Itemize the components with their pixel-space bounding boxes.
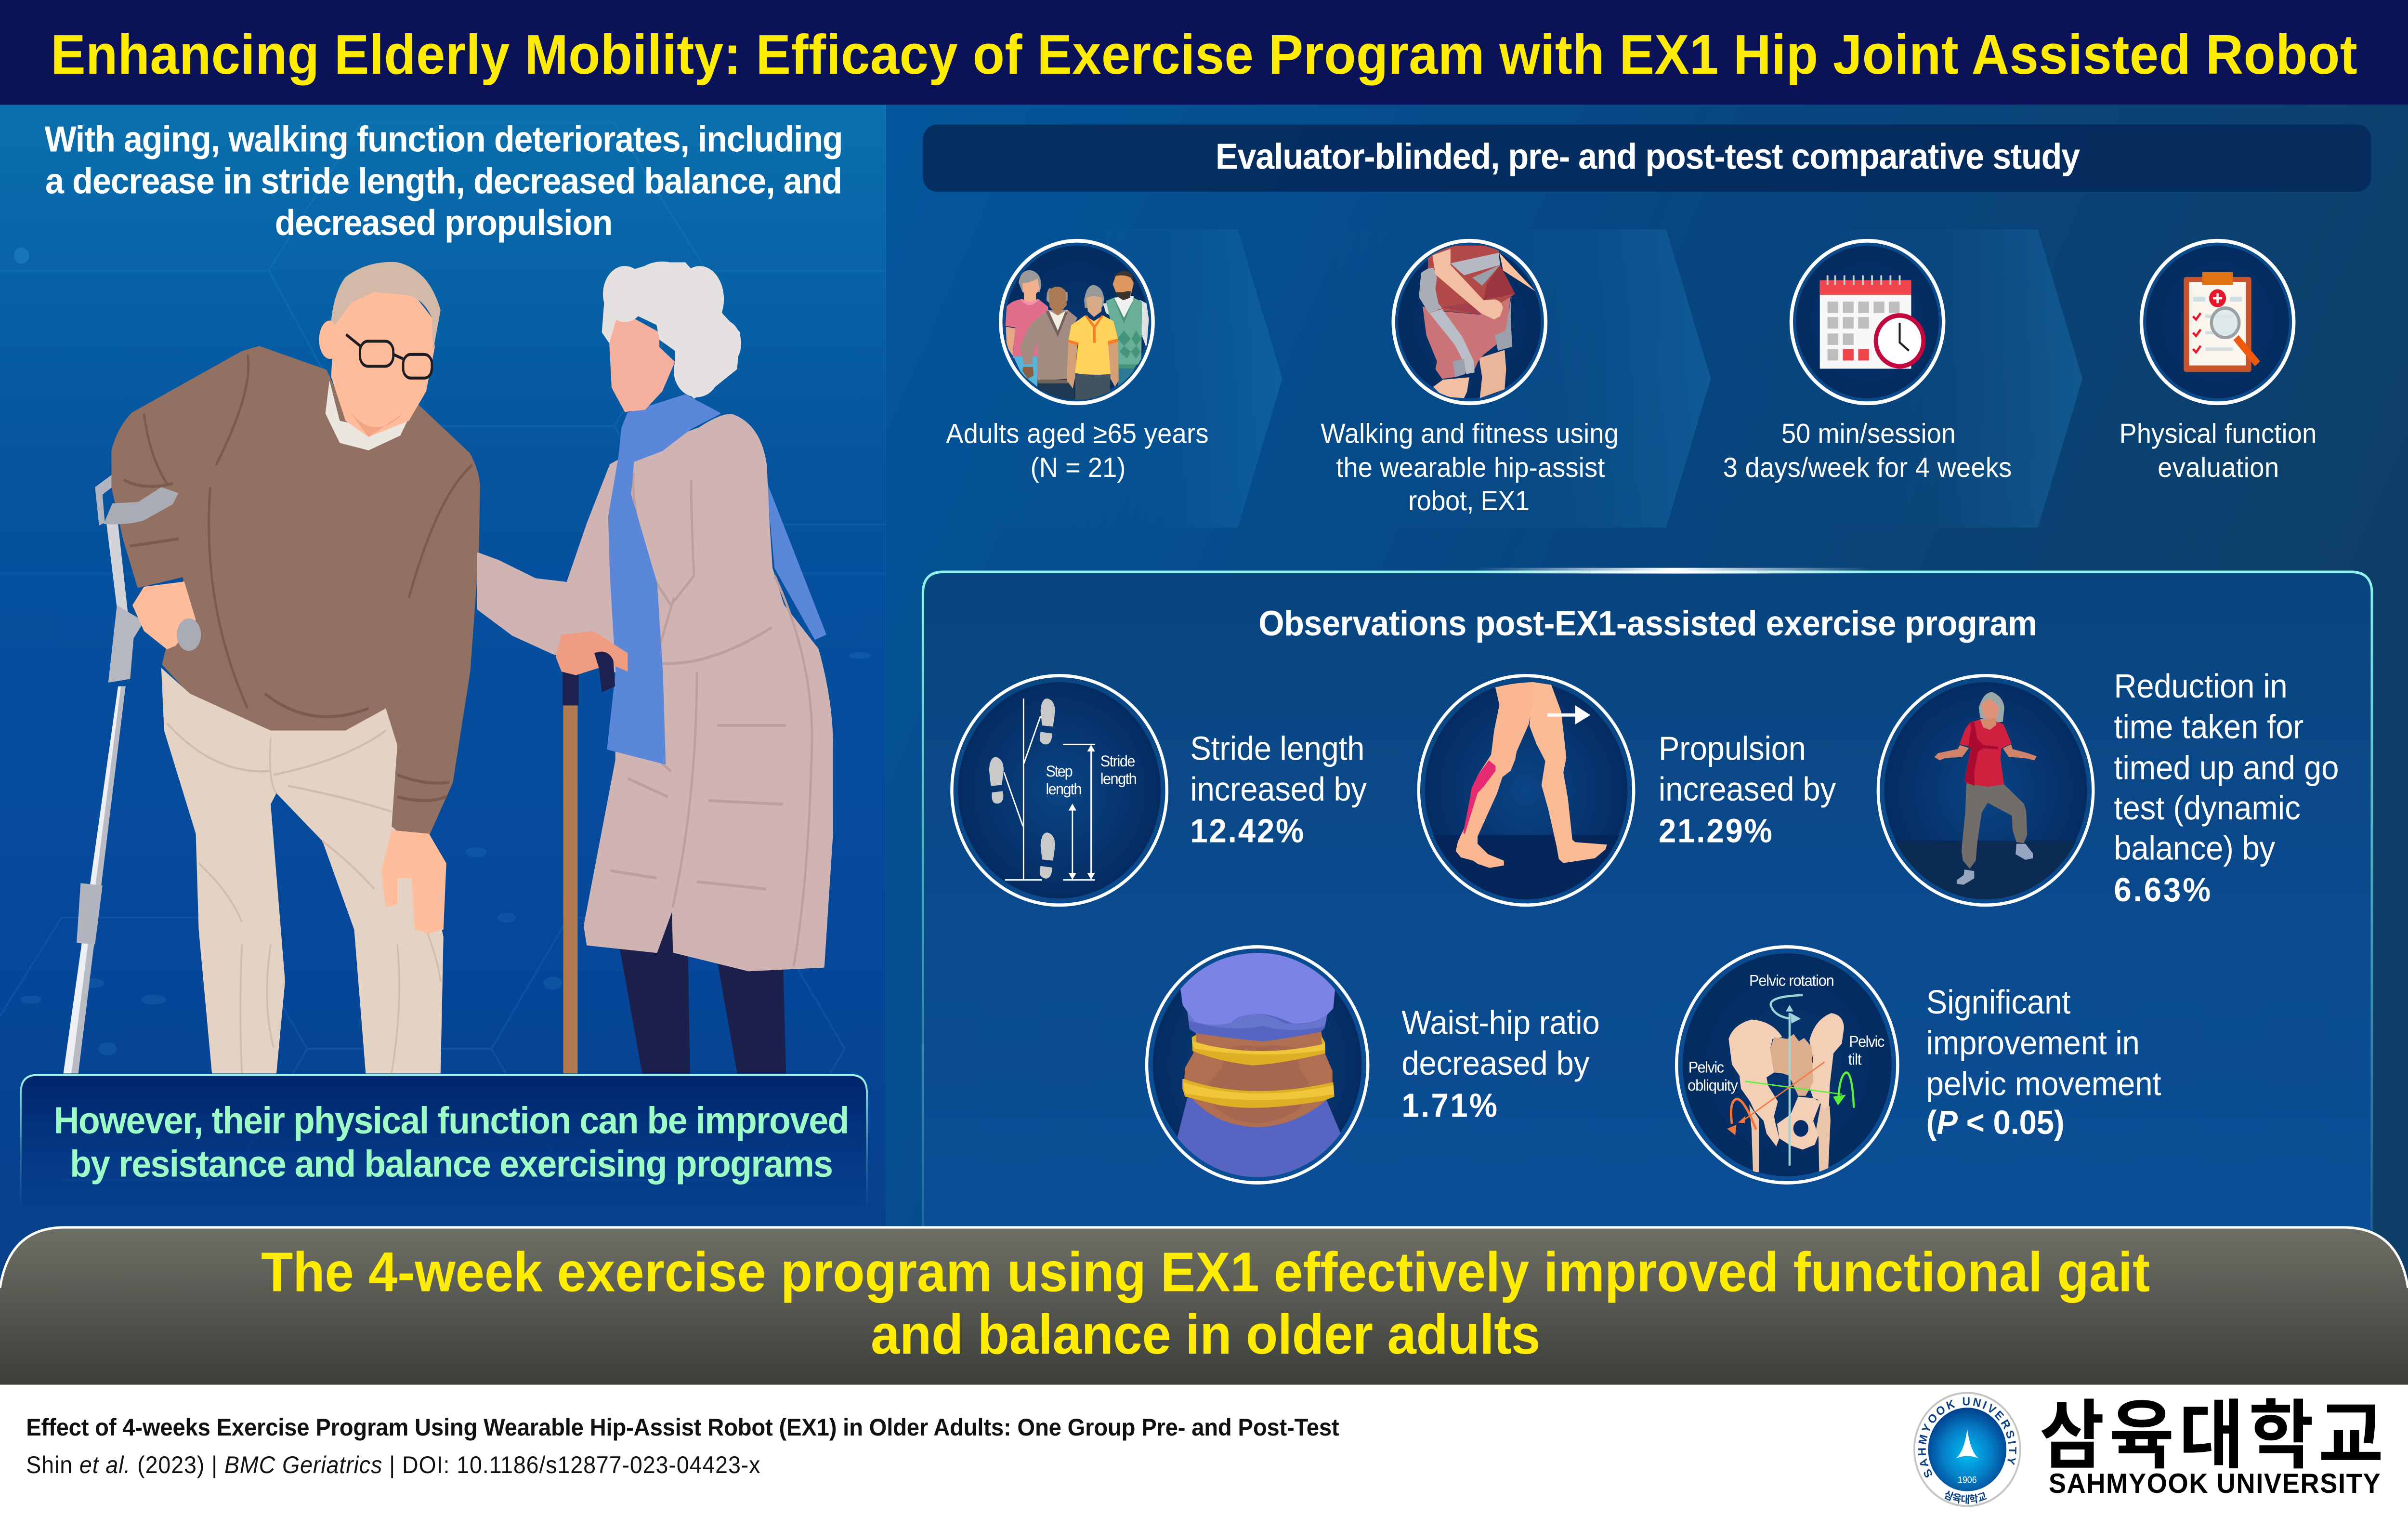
logo: university seal: 삼육대학교	[1945, 1490, 1987, 1504]
step 4: evaluation	[2120, 241, 2316, 483]
step 1 label: (N = 21)	[1031, 451, 1125, 483]
hand on crutch	[132, 581, 196, 649]
intro text block: a decrease in stride length, decreased balance, and	[45, 161, 842, 201]
observation: timed up and go	[1873, 668, 2339, 909]
step 1: participants	[946, 241, 1209, 483]
step 1 label: Adults aged ≥65 years	[946, 418, 1209, 449]
icon: walking legs	[1413, 676, 1638, 907]
hand on knee	[381, 830, 446, 934]
panel: study heading	[923, 125, 2371, 192]
glasses	[346, 334, 432, 378]
observation: propulsion	[1413, 676, 1836, 907]
icon: calendar and clock	[1791, 241, 1944, 403]
intro text block: decreased propulsion	[275, 203, 613, 243]
coat	[478, 415, 832, 970]
chevron arrow 1	[983, 229, 1283, 527]
step 3: schedule	[1723, 241, 2012, 483]
timed up and go text: balance) by	[2114, 830, 2275, 867]
icon: footsteps diagram: length	[1100, 770, 1137, 788]
intro text block	[44, 119, 843, 243]
stride length text: 12.42%	[1190, 813, 1304, 850]
stride length text: Stride length	[1190, 730, 1365, 767]
logo: university wordmark: SAHMYOOK UNIVERSITY	[2049, 1467, 2381, 1499]
background: right panel	[886, 105, 2408, 1317]
waist-hip text	[1401, 1004, 1600, 1124]
panel: observations	[923, 568, 2372, 1278]
icon: footsteps diagram: length	[1046, 780, 1082, 798]
hair	[602, 262, 741, 399]
conclusion text	[261, 1241, 2150, 1366]
chevron arrow 2	[1321, 229, 1711, 527]
step 4 label: evaluation	[2158, 451, 2279, 483]
propulsion text: increased by	[1659, 771, 1836, 808]
head	[319, 262, 441, 437]
head	[609, 310, 675, 412]
pelvic movement text	[1926, 984, 2161, 1142]
step 2 label: Walking and fitness using	[1321, 418, 1619, 449]
timed up and go text	[2114, 668, 2339, 909]
citation title: Effect of 4-weeks Exercise Program Using Wearable Hip-Assist Robot (EX1) in Older Adults: One Group Pre- and Post-Test	[26, 1414, 1339, 1441]
trousers	[161, 668, 444, 1073]
conclusion text: The 4-week exercise program using EX1 effectively improved functional gait	[261, 1241, 2150, 1303]
waist-hip text: decreased by	[1401, 1045, 1590, 1082]
step 4 label	[2120, 418, 2316, 483]
icon: pelvis with motion axes	[1676, 947, 1898, 1183]
observations heading: Observations post-EX1-assisted exercise program	[1258, 604, 2037, 643]
waist-hip text: 1.71%	[1401, 1087, 1497, 1124]
timed up and go text: Reduction in	[2114, 668, 2288, 705]
conclusion text: and balance in older adults	[871, 1304, 1540, 1366]
timed up and go text: timed up and go	[2114, 750, 2339, 787]
propulsion text: 21.29%	[1659, 813, 1772, 850]
icon: pelvis with motion axes: Pelvic rotation	[1749, 972, 1834, 989]
observation: pelvic movement	[1676, 947, 2161, 1183]
step 4 label: Physical function	[2120, 418, 2316, 449]
step 1 label	[946, 418, 1209, 483]
icon: hip-assist robot	[1393, 241, 1546, 403]
step 2 label: robot, EX1	[1408, 485, 1530, 516]
logo: university wordmark: 삼육대학교	[2040, 1374, 2383, 1484]
propulsion text	[1659, 730, 1836, 850]
icon: standing older adult	[1873, 676, 2099, 908]
observation: waist-hip ratio	[1147, 947, 1600, 1183]
icon: footsteps diagram: Step	[1046, 762, 1073, 780]
waist-hip text: Waist-hip ratio	[1401, 1004, 1600, 1041]
intro text block: With aging, walking function deteriorates, including	[44, 119, 843, 159]
citation details: Shin et al. (2023) | BMC Geriatrics | DOI: 10.1186/s12877-023-04423-x	[26, 1452, 760, 1479]
back scarf	[766, 480, 826, 640]
timed up and go text: 6.63%	[2114, 871, 2211, 909]
step 2 label: the wearable hip-assist	[1336, 451, 1605, 483]
propulsion text: Propulsion	[1659, 730, 1806, 767]
cane	[563, 672, 579, 1073]
icon: clipboard and magnifier	[2141, 241, 2294, 403]
callout: physical function can be improved	[21, 1075, 867, 1210]
timed up and go text: test (dynamic	[2114, 790, 2301, 827]
logo: university seal: 1906	[1958, 1475, 1977, 1485]
stride length text: increased by	[1190, 771, 1367, 808]
logo: university seal: SAHMYOOK UNIVERSITY	[1918, 1397, 2016, 1478]
pelvic movement text: improvement in	[1926, 1025, 2140, 1062]
pelvic movement text: Significant	[1926, 984, 2071, 1021]
icon: older adults group	[1001, 241, 1153, 403]
hand on cane	[556, 631, 628, 675]
illustration: elderly man with crutch	[64, 262, 479, 1073]
scarf	[608, 395, 720, 764]
chevron arrow 3	[1720, 229, 2082, 527]
icon: pelvis with motion axes: obliquity	[1688, 1076, 1738, 1094]
title text: Enhancing Elderly Mobility: Efficacy of Exercise Program with EX1 Hip Joint Assisted Robot	[51, 24, 2357, 86]
callout: physical function can be improved: However, their physical function can be improved	[54, 1099, 849, 1142]
step 2 label	[1321, 418, 1619, 516]
arm rest of crutch	[104, 487, 179, 525]
stride length text	[1190, 730, 1367, 850]
icon: pelvis with motion axes: Pelvic	[1688, 1058, 1724, 1076]
sweater	[112, 347, 479, 834]
pelvic movement text: pelvic movement	[1926, 1066, 2161, 1103]
pelvic movement text: (P < 0.05)	[1926, 1104, 2065, 1142]
step 3 label: 3 days/week for 4 weeks	[1723, 451, 2012, 483]
conclusion banner	[0, 1227, 2408, 1385]
legs	[619, 908, 786, 1073]
step 3 label: 50 min/session	[1781, 418, 1956, 449]
icon: waist with measuring tape	[1147, 947, 1368, 1183]
observation: stride length	[952, 676, 1367, 905]
background: left panel	[0, 105, 886, 1317]
icon: pelvis with motion axes: Pelvic	[1849, 1032, 1885, 1050]
logo: university seal	[1913, 1392, 2021, 1507]
icon: footsteps diagram	[952, 676, 1167, 905]
shirt collar	[326, 380, 415, 450]
illustration: elderly woman with cane	[478, 262, 832, 1073]
icon: footsteps diagram: Stride	[1100, 752, 1135, 770]
panel: study heading: Evaluator-blinded, pre- and post-test comparative study	[1216, 136, 2080, 177]
crutch	[64, 474, 144, 1073]
timed up and go text: time taken for	[2114, 709, 2303, 746]
footer	[26, 1374, 2383, 1507]
callout: physical function can be improved: by resistance and balance exercising programs	[70, 1143, 833, 1185]
title band	[0, 0, 2408, 105]
step 2: wearable robot	[1321, 241, 1619, 516]
icon: pelvis with motion axes: tilt	[1848, 1050, 1862, 1068]
step 3 label	[1723, 418, 2012, 483]
